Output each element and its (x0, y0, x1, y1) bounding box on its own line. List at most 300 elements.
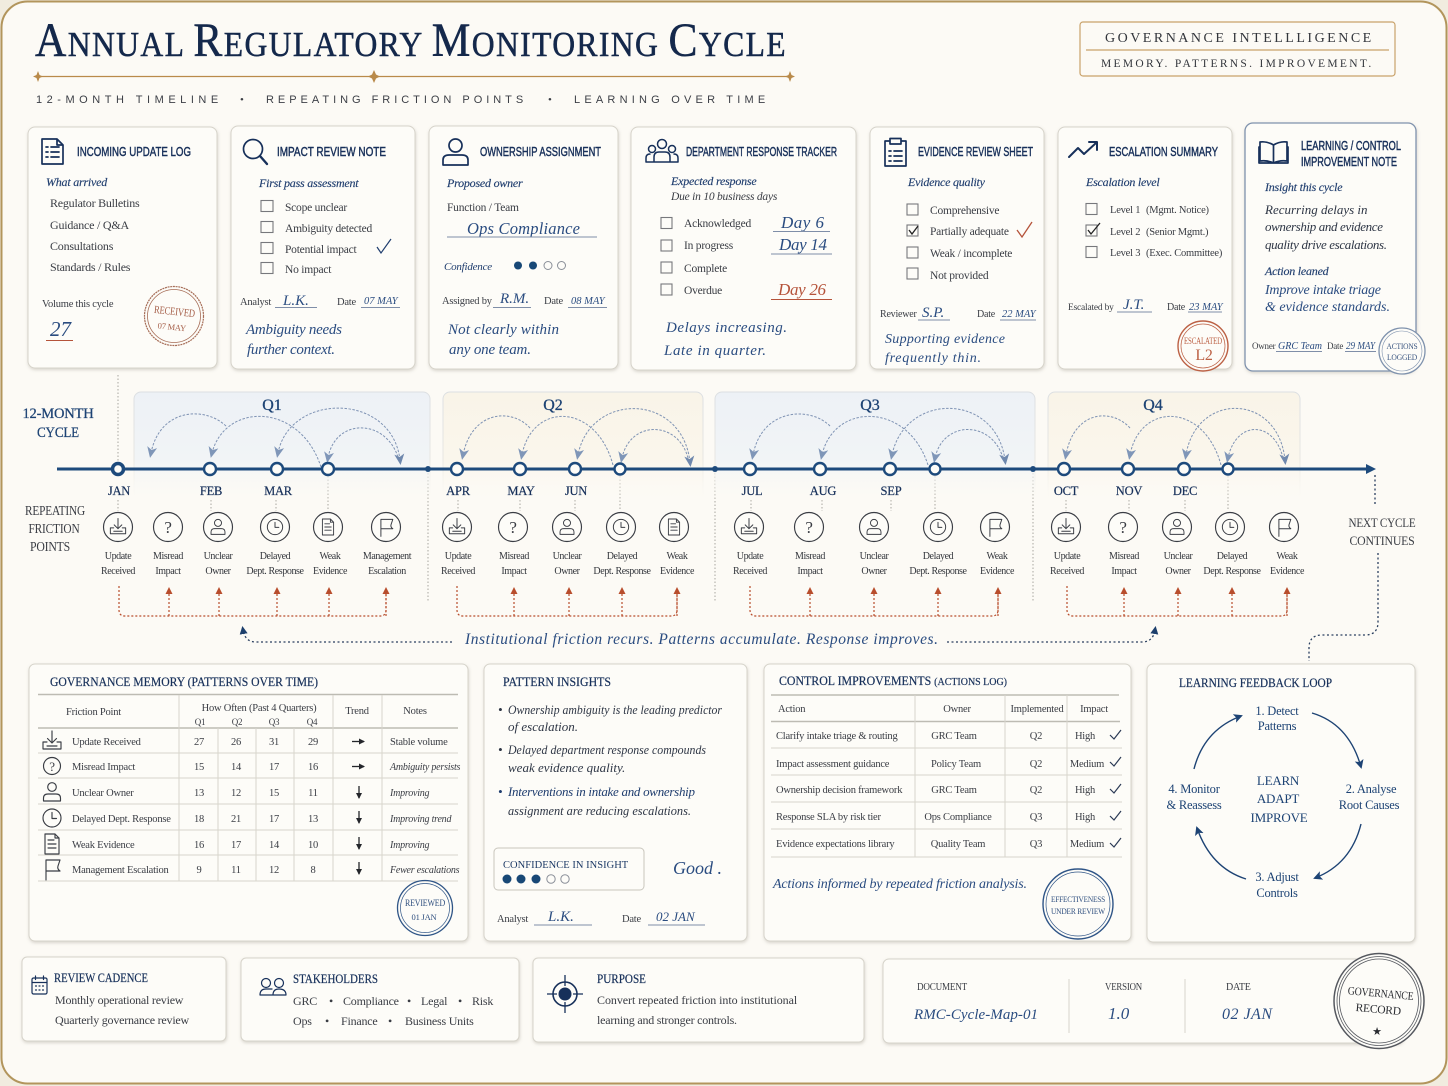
friction points label: POINTS (30, 539, 70, 554)
subtitle: • (240, 94, 244, 106)
card: evidence review sheet: Partially adequate (930, 226, 1009, 238)
row: misread impact: 16 (308, 762, 318, 773)
friction points label: REPEATING (25, 503, 85, 518)
stamp: reviewed: REVIEWED (405, 899, 445, 909)
friction points Q4: Delayed (1217, 551, 1248, 562)
panel: stakeholders: GRC (293, 994, 317, 1008)
stamp: actions logged (1379, 328, 1425, 374)
governance intelligence tag: GOVERNANCE INTELLLIGENCE (1105, 31, 1371, 46)
row: update received: 26 (231, 737, 241, 748)
table: Notes (403, 706, 427, 717)
row: delayed dept response: Improving trend (389, 814, 452, 825)
row: management escalation (46, 860, 460, 880)
row: update received: 31 (269, 737, 279, 748)
card: impact review note: No impact (285, 264, 332, 276)
row: management escalation: 9 (196, 865, 202, 876)
month labels: JUL (742, 484, 762, 498)
row: misread impact: Misread Impact (72, 762, 135, 773)
panel: stakeholders: Ops (293, 1014, 312, 1028)
friction points Q3: Unclear (860, 551, 889, 562)
stamp: governance record (1334, 954, 1424, 1048)
panel: pattern insights: Date (622, 914, 642, 925)
stamp: reviewed (398, 880, 452, 936)
friction points Q3: Received (733, 566, 767, 577)
panel: governance memory (29, 664, 468, 941)
friction points Q1: Dept. Response (246, 566, 305, 577)
loop steps: 2. Analyse (1346, 782, 1397, 796)
friction points Q1: Unclear (204, 551, 233, 562)
card: ownership assignment: Proposed owner (446, 176, 523, 190)
card: evidence review sheet: frequently thin. (885, 351, 981, 366)
row: misread impact (44, 758, 461, 774)
card: evidence review sheet: 22 MAY (1002, 309, 1037, 320)
panel: Q4: Q4 (1143, 397, 1163, 414)
card: ownership assignment: Date (544, 296, 564, 307)
row: weak evidence: Weak Evidence (72, 840, 135, 851)
row: misread impact: 15 (194, 762, 204, 773)
row: GRC Team (931, 785, 977, 796)
panel: document record (883, 954, 1424, 1048)
card: ownership assignment: R.M. (499, 291, 529, 307)
panel: pattern insights (484, 664, 747, 941)
card: ownership assignment: Not clearly within (447, 322, 559, 338)
stamp: received (144, 286, 204, 346)
panel: stakeholders: • (329, 994, 333, 1008)
panel: Q1 (134, 392, 430, 504)
panel: stakeholders: Legal (421, 994, 448, 1008)
icon: target (547, 975, 583, 1013)
panel: stakeholders: • (458, 994, 462, 1008)
friction points Q3: Weak (987, 551, 1008, 562)
panel: control improvements (764, 664, 1131, 941)
heading: PATTERN INSIGHTS (503, 675, 611, 689)
card: impact review note: Date (337, 297, 357, 308)
panel: review cadence (22, 957, 226, 1041)
friction points Q4: Unclear (1164, 551, 1193, 562)
icon: calendar (32, 976, 47, 994)
loop steps: 4. Monitor (1168, 782, 1221, 796)
panel: review cadence: REVIEW CADENCE (54, 971, 148, 985)
friction points Q2: Evidence (660, 566, 695, 577)
card: impact review note: First pass assessment (258, 176, 359, 190)
card: impact review note: Ambiguity needs (245, 322, 342, 338)
table: Q2 (232, 717, 242, 727)
panel: Q4 (1048, 392, 1300, 504)
card: learning control improvement note: Action leaned (1264, 264, 1330, 278)
row: delayed dept response (43, 809, 452, 827)
card: department response tracker: Acknowledged (684, 218, 751, 230)
row: delayed dept response: 13 (308, 814, 318, 825)
friction points Q4: Update (1054, 551, 1081, 562)
card: evidence review sheet: Weak / incomplete (930, 248, 1012, 260)
row: Q2 (1030, 785, 1042, 796)
loop steps: 3. Adjust (1255, 870, 1299, 884)
card: evidence review sheet: S.P. (922, 305, 944, 321)
friction points Q1: Delayed (260, 551, 291, 562)
loop steps: Root Causes (1339, 798, 1400, 812)
loop arrows (1194, 713, 1361, 879)
table (771, 695, 1122, 857)
card: evidence review sheet: Reviewer (880, 309, 917, 320)
friction points Q4 (1050, 512, 1305, 577)
cycle label: 12-MONTH (22, 406, 94, 422)
panel: stakeholders: STAKEHOLDERS (293, 972, 378, 986)
row: Q2 (1030, 759, 1042, 770)
row: misread impact: Ambiguity persists (389, 762, 461, 773)
row: misread impact: 14 (231, 762, 242, 773)
panel: pattern insights: Good . (673, 858, 722, 878)
panel: Q2: Q2 (543, 397, 563, 414)
insight list: of escalation. (508, 719, 578, 734)
row: management escalation: 12 (269, 865, 279, 876)
insight list: assignment are reducing escalations. (508, 803, 691, 818)
row: management escalation: 11 (231, 865, 241, 876)
friction points Q1: Received (101, 566, 135, 577)
recurrence statement with arrows (243, 630, 1155, 648)
next cycle continues: CONTINUES (1350, 534, 1415, 548)
row: Ops Compliance (924, 812, 992, 823)
row: Impact assessment guidance (776, 759, 890, 770)
card: department response tracker: Late in quarter. (663, 343, 766, 359)
card: escalation summary: Date (1167, 302, 1186, 313)
stamp: received: RECEIVED (153, 304, 196, 320)
subtitle: • (548, 94, 552, 106)
card: impact review note: further context. (247, 342, 335, 358)
card: learning control improvement note: GRC Team (1278, 341, 1322, 352)
loop centre text: LEARN (1257, 773, 1300, 788)
card: evidence review sheet: Supporting evidence (885, 332, 1005, 347)
subtitle: 12-MONTH TIMELINE (36, 94, 218, 106)
insight list: Delayed department response compounds (507, 742, 706, 757)
table: Q4 (307, 717, 318, 727)
card: incoming update log (28, 127, 217, 368)
row: Response SLA by risk tier (776, 812, 881, 823)
card: learning control improvement note: ownership and evidence (1265, 219, 1383, 234)
panel: Q2 (443, 392, 703, 504)
panel: review cadence: Quarterly governance review (55, 1013, 190, 1027)
card title: IMPACT REVIEW NOTE (277, 144, 386, 159)
friction points Q2: Owner (554, 566, 581, 577)
card: incoming update log: Regulator Bulletins (50, 196, 140, 210)
subtitle: REPEATING FRICTION POINTS (266, 94, 523, 106)
card: learning control improvement note: 29 MAY (1346, 341, 1376, 352)
row: High (1075, 812, 1096, 823)
cycle label: CYCLE (37, 425, 79, 441)
panel: Q3: Q3 (860, 397, 880, 414)
row: Medium (1070, 839, 1104, 850)
icon: people (260, 978, 286, 995)
friction points Q2: Unclear (553, 551, 582, 562)
friction points Q4: Evidence (1270, 566, 1305, 577)
heading: CONTROL IMPROVEMENTS (ACTIONS LOG) (779, 674, 1007, 688)
row: weak evidence: 14 (269, 840, 280, 851)
icon: people (646, 140, 678, 162)
card: incoming update log: Consultations (50, 239, 114, 253)
friction points Q3: Owner (861, 566, 888, 577)
card: department response tracker: Day 6 (780, 213, 824, 232)
card title: INCOMING UPDATE LOG (77, 144, 191, 159)
card: incoming update log: Guidance / Q&A (50, 218, 129, 232)
card title: LEARNING / CONTROL (1301, 138, 1401, 153)
insight list (498, 702, 723, 818)
row: unclear owner: Improving (389, 788, 430, 799)
friction points Q2: Update (445, 551, 472, 562)
card title: ESCALATION SUMMARY (1109, 144, 1218, 159)
row: update received: Stable volume (390, 737, 448, 748)
icon: trend arrow (1069, 142, 1097, 157)
friction points Q4: Impact (1111, 566, 1137, 577)
row: unclear owner: 13 (194, 788, 204, 799)
table: Q3 (269, 717, 280, 727)
month labels: MAY (507, 484, 535, 498)
card: impact review note: 07 MAY (364, 296, 399, 307)
card: escalation summary: Level 3 (1110, 248, 1140, 259)
friction points Q1: ? (164, 518, 172, 537)
friction points Q4: Received (1050, 566, 1084, 577)
row: Medium (1070, 759, 1104, 770)
row: update received (43, 731, 448, 749)
row: Q2 (1030, 731, 1042, 742)
friction points Q1: Weak (320, 551, 341, 562)
friction points Q3: Misread (795, 551, 825, 562)
card: incoming update log: Volume this cycle (42, 299, 114, 310)
loop centre text: IMPROVE (1251, 810, 1308, 825)
loop steps: & Reassess (1166, 798, 1222, 812)
card: impact review note: L.K. (282, 293, 309, 309)
friction points label (25, 503, 85, 554)
friction points Q3: Update (737, 551, 764, 562)
subtitle (36, 94, 765, 106)
card title: EVIDENCE REVIEW SHEET (918, 144, 1033, 159)
stamp: governance record: GOVERNANCE (1347, 985, 1414, 1003)
row: misread impact: ? (49, 759, 55, 774)
row: management escalation: 8 (310, 865, 316, 876)
card: evidence review sheet (870, 127, 1044, 369)
row: weak evidence (45, 834, 430, 854)
row: unclear owner: 15 (269, 788, 279, 799)
friction points Q2: Weak (667, 551, 688, 562)
month labels: DEC (1173, 484, 1197, 498)
friction points Q1: Escalation (368, 566, 406, 577)
friction points Q2: Delayed (607, 551, 638, 562)
card: learning control improvement note: Recurring delays in (1264, 202, 1368, 217)
stamp: received: 07 MAY (157, 320, 187, 333)
row: Policy Team (931, 759, 981, 770)
friction points Q2: Impact (501, 566, 527, 577)
month labels: JAN (108, 484, 130, 498)
card: impact review note (231, 126, 415, 369)
friction points Q1: Impact (155, 566, 181, 577)
panel: purpose: learning and stronger controls. (597, 1013, 737, 1027)
panel: pattern insights: 02 JAN (656, 909, 696, 924)
friction points Q2 (441, 512, 695, 577)
handwritten note: Actions informed by repeated friction analysis. (772, 877, 1027, 892)
next cycle continues: NEXT CYCLE (1348, 516, 1416, 530)
card: department response tracker (631, 127, 856, 370)
heading: GOVERNANCE MEMORY (PATTERNS OVER TIME) (50, 675, 318, 689)
row: Quality Team (931, 839, 985, 850)
insight list: • (498, 742, 503, 757)
insight list: Ownership ambiguity is the leading predictor (508, 702, 723, 717)
table: Action (778, 704, 806, 715)
card: incoming update log: Standards / Rules (50, 260, 131, 274)
panel: purpose: Convert repeated friction into institutional (597, 993, 798, 1007)
month labels: NOV (1116, 484, 1142, 498)
card: escalation summary: Escalated by (1068, 303, 1114, 313)
row (776, 811, 1121, 823)
row: High (1075, 785, 1096, 796)
card: department response tracker: Overdue (684, 285, 722, 297)
panel: stakeholders: • (325, 1014, 329, 1028)
next cycle continues (1309, 475, 1416, 661)
table: Q1 (195, 717, 205, 727)
panel: Q3 (715, 392, 1035, 504)
friction points Q1 (101, 512, 412, 577)
panel: stakeholders: Finance (341, 1014, 377, 1028)
panel: stakeholders: Business Units (405, 1014, 474, 1028)
loop steps: 1. Detect (1255, 704, 1299, 718)
card title: DEPARTMENT RESPONSE TRACKER (686, 144, 837, 159)
card: escalation summary: J.T. (1123, 297, 1144, 313)
card: impact review note: Ambiguity detected (285, 223, 373, 235)
card: evidence review sheet: Date (977, 309, 996, 320)
loop steps (1166, 704, 1400, 900)
friction points Q4: Weak (1277, 551, 1298, 562)
month labels: APR (446, 484, 471, 498)
card: escalation summary: Escalation level (1085, 175, 1160, 189)
friction points Q3 (733, 512, 1015, 577)
friction points Q2: ? (509, 518, 517, 537)
panel: pattern insights: L.K. (547, 909, 574, 925)
panel: stakeholders: Risk (472, 994, 493, 1008)
panel: stakeholders: • (388, 1014, 392, 1028)
row: misread impact: 17 (269, 762, 279, 773)
friction points Q1: Owner (205, 566, 232, 577)
card: escalation summary: (Exec. Committee) (1146, 248, 1223, 259)
red recurrence brackets (119, 586, 1287, 616)
governance intelligence tag: MEMORY. PATTERNS. IMPROVEMENT. (1101, 58, 1371, 70)
row: weak evidence: 16 (194, 840, 204, 851)
card: learning control improvement note: & evidence standards. (1265, 300, 1390, 315)
panel: stakeholders: Compliance (343, 994, 399, 1008)
panel: document record: DOCUMENT (917, 982, 967, 993)
panel: purpose (533, 958, 864, 1042)
panel: pattern insights: Analyst (497, 914, 528, 925)
month labels (108, 484, 1197, 498)
stamp: effectiveness under review (1043, 869, 1113, 939)
table: How Often (Past 4 Quarters) (202, 703, 317, 714)
row: unclear owner: Unclear Owner (72, 788, 134, 799)
stamp: effectiveness under review: EFFECTIVENESS (1051, 894, 1105, 904)
panel: document record: DATE (1226, 982, 1251, 993)
row: Ownership decision framework (776, 785, 903, 796)
stamp: actions logged: ACTIONS (1386, 341, 1418, 351)
stamp: governance record: RECORD (1355, 1002, 1401, 1018)
row: unclear owner: 12 (231, 788, 241, 799)
card: learning control improvement note: Improve intake triage (1264, 283, 1381, 298)
loop steps: Controls (1256, 886, 1298, 900)
panel: review cadence: Monthly operational review (55, 993, 184, 1007)
friction points Q2: Dept. Response (593, 566, 652, 577)
icon: document list (42, 139, 63, 164)
friction points Q4: Misread (1109, 551, 1139, 562)
month labels: AUG (810, 484, 836, 498)
loop centre text (1251, 773, 1308, 825)
stamp: escalated L2: L2 (1195, 347, 1213, 364)
row: unclear owner: 11 (308, 788, 318, 799)
card: ownership assignment: Assigned by (442, 296, 493, 307)
card: department response tracker: Delays increasing. (665, 320, 787, 336)
friction points Q3: Delayed (923, 551, 954, 562)
row: Q3 (1030, 839, 1042, 850)
month labels: FEB (200, 484, 222, 498)
row: delayed dept response: 21 (231, 814, 241, 825)
row: weak evidence: 10 (308, 840, 318, 851)
row: update received: 29 (308, 737, 318, 748)
loop centre text: ADAPT (1257, 791, 1299, 806)
month labels: JUN (565, 484, 587, 498)
card: learning control improvement note: quality drive escalations. (1265, 237, 1387, 252)
friction points Q2: Received (441, 566, 475, 577)
card title: IMPROVEMENT NOTE (1301, 154, 1397, 169)
row: update received: 27 (194, 737, 204, 748)
insight list: • (498, 702, 503, 717)
icon: open book (1259, 142, 1288, 163)
card: evidence review sheet: Comprehensive (930, 205, 999, 217)
panel: purpose: PURPOSE (597, 972, 646, 986)
insight list: weak evidence quality. (508, 760, 625, 775)
row: unclear owner (44, 783, 430, 801)
stamp: actions logged: LOGGED (1387, 352, 1417, 362)
month labels: SEP (881, 484, 902, 498)
panel: document record: RMC-Cycle-Map-01 (913, 1007, 1038, 1023)
row: delayed dept response: 17 (269, 814, 279, 825)
card: learning control improvement note: Insight this cycle (1264, 180, 1343, 194)
stamp: governance record: ★ (1372, 1026, 1382, 1038)
friction points Q1: Evidence (313, 566, 348, 577)
friction points Q3: ? (805, 518, 813, 537)
row (776, 838, 1121, 850)
recurrence statement with arrows: Institutional friction recurs. Patterns accumulate. Response improves. (464, 631, 938, 648)
stamp: reviewed: 01 JAN (412, 912, 437, 922)
row: delayed dept response: 18 (194, 814, 204, 825)
panel: document record: 02 JAN (1222, 1006, 1273, 1023)
row (776, 730, 1121, 742)
card: learning control improvement note (1245, 123, 1425, 374)
card: ownership assignment: Confidence (444, 261, 492, 273)
friction points Q1: Misread (153, 551, 183, 562)
panel: Q1: Q1 (262, 397, 282, 414)
friction points Q3: Evidence (980, 566, 1015, 577)
timeline section (22, 375, 1416, 661)
card: ownership assignment (429, 126, 618, 369)
row: management escalation: Fewer escalations (389, 865, 460, 876)
card title: OWNERSHIP ASSIGNMENT (480, 144, 601, 159)
friction points Q3: Dept. Response (909, 566, 968, 577)
friction points Q2: Misread (499, 551, 529, 562)
confidence box: CONFIDENCE IN INSIGHT (503, 860, 629, 871)
row: weak evidence: Improving (389, 840, 430, 851)
card: escalation summary: Level 2 (1110, 227, 1140, 238)
card: incoming update log: 27 (50, 317, 72, 341)
row (776, 784, 1121, 796)
card: evidence review sheet: Evidence quality (907, 175, 986, 189)
insight list: • (498, 784, 503, 799)
icon: clipboard (885, 138, 906, 166)
title rule (33, 70, 795, 83)
heading: LEARNING FEEDBACK LOOP (1179, 676, 1332, 690)
card: incoming update log: What arrived (46, 175, 108, 189)
